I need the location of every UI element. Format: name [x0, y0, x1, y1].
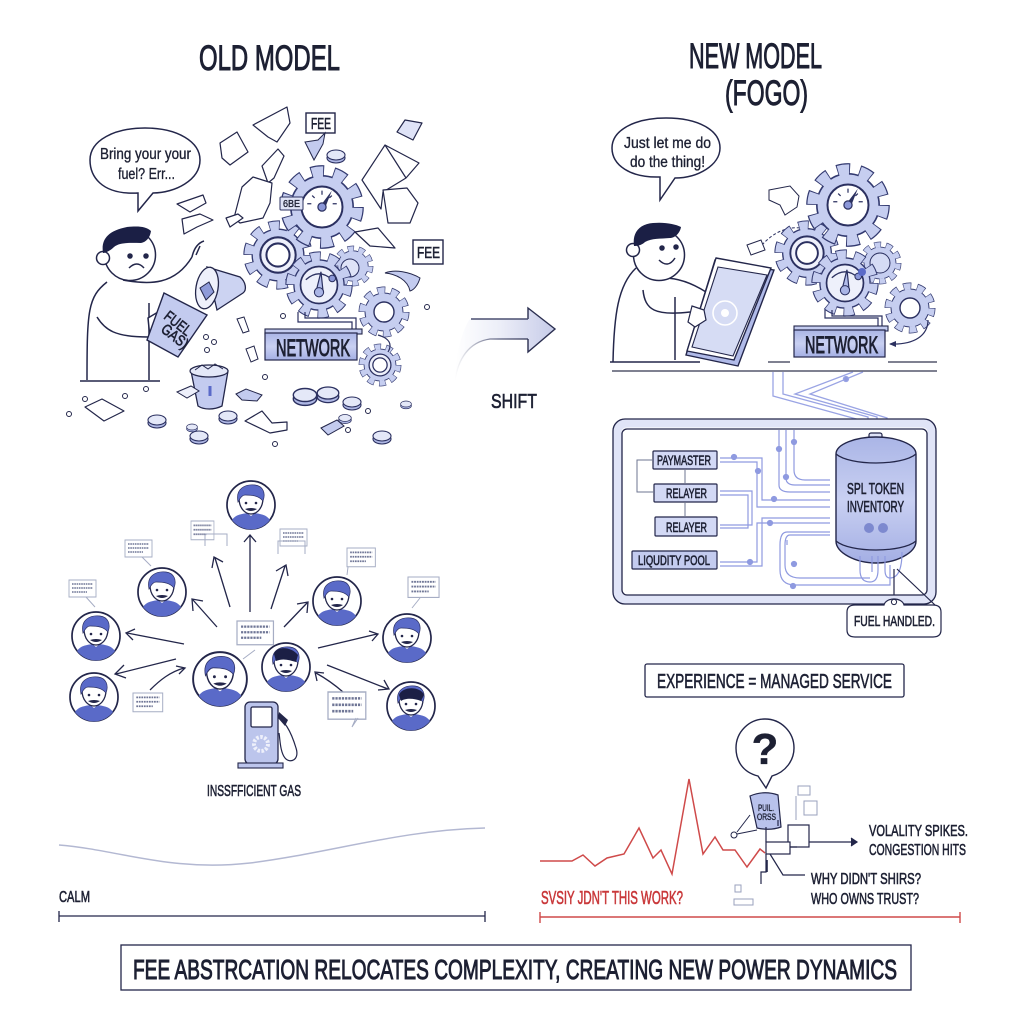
SPL token tank: SPL TOKEN: [847, 481, 904, 498]
scattered coins and bills: [66, 150, 430, 446]
panel: network of users with insufficient gas: [69, 481, 439, 800]
title: new model: (FOGO): [725, 74, 808, 113]
bin with discarded fuel: [190, 364, 228, 409]
network box: NETWORK: [276, 335, 350, 362]
paymaster box: [653, 451, 717, 469]
relayer box: [654, 484, 717, 502]
title: new model: [689, 37, 822, 113]
ground lines: [612, 362, 937, 371]
small fuel can: PUIL.: [758, 803, 774, 813]
speech bubble: bring your fuel: Bring your your: [100, 146, 192, 163]
small fuel can: ORSS: [757, 812, 776, 822]
speech bubble: just let me do the thing: do the thing!: [630, 154, 705, 171]
speech bubble: bring your fuel: fuel? Err...: [118, 166, 175, 183]
network box: [265, 329, 362, 362]
fuel can labelled FUEL GAS: [147, 293, 207, 357]
callout: why didn't shirs: WHO OWNS TRUST?: [811, 891, 919, 908]
small grey icons: [734, 786, 817, 905]
pipes to tank: [773, 372, 887, 440]
routing pipes: [720, 430, 890, 588]
stacked boxes and connectors: [761, 820, 857, 884]
frame: [617, 423, 932, 600]
small speech notes: [69, 521, 439, 727]
gear cluster with gauges: [248, 171, 406, 383]
panel: new model scene: [610, 118, 937, 371]
fuel can labelled FUEL GAS: GAS): [158, 321, 192, 353]
calm timeline: CALM: [59, 889, 90, 906]
SPL token tank: [836, 433, 916, 582]
speech bubble: just let me do the thing: Just let me do: [624, 135, 711, 152]
paymaster box: PAYMASTER: [657, 453, 711, 468]
callout: fuel handled: FUEL HANDLED.: [854, 613, 935, 630]
liquidity pool box: LIQUDITY POOL: [638, 553, 710, 568]
icon: fuel pump: [238, 702, 297, 768]
callout: volatility spikes: CONGESTION HITS: [869, 842, 966, 859]
gear cluster with gauges: 6BE: [283, 199, 300, 210]
character: confused user pouring fuel: [80, 226, 204, 381]
fee tag right: [385, 240, 443, 291]
fee tag right: FEE: [417, 245, 440, 262]
user avatars: [70, 481, 435, 730]
question bubble: [736, 719, 794, 788]
relayer box: RELAYER: [666, 520, 707, 535]
small fuel can: [731, 793, 781, 838]
network box new: NETWORK: [805, 332, 878, 359]
arrows radiating: [115, 535, 389, 692]
experience = managed service label: EXPERIENCE = MANAGED SERVICE: [657, 671, 892, 693]
calm timeline: [59, 828, 485, 922]
shift arrow: SHIFT: [491, 391, 537, 413]
callout: why didn't shirs: WHY DIDN'T SHIRS?: [811, 871, 921, 888]
red question label: SVSIY JDN'T THIS WORK?: [541, 888, 683, 908]
question bubble: ?: [752, 725, 778, 774]
relayer box: RELAYER: [666, 486, 707, 501]
volatile timeline: [540, 719, 968, 923]
title: old model: OLD MODEL: [199, 39, 340, 78]
tablet device: [686, 258, 774, 366]
network box new: [794, 326, 888, 359]
callout: volatility spikes: VOLALITY SPIKES.: [869, 823, 968, 840]
fee tag top: [305, 113, 335, 160]
speech bubble: bring your fuel: [90, 128, 200, 211]
red spike chart: [540, 779, 765, 874]
character: happy user with tablet: [610, 223, 706, 362]
experience = managed service label: [645, 664, 904, 697]
panel: old model chaos scene: [66, 107, 443, 446]
fuel can labelled FUEL GAS: FUEL: [161, 308, 195, 340]
gear cluster new: [747, 169, 932, 347]
relayer box: [655, 517, 717, 536]
bottom conclusion banner: [121, 945, 911, 990]
liquidity pool box: [632, 551, 717, 569]
SPL token tank: INVENTORY: [847, 499, 904, 516]
panel: paymaster and tank diagram: [613, 419, 941, 637]
flying paper receipts: [85, 107, 422, 433]
tilted can pouring into gears: [193, 265, 245, 311]
red axis: [540, 912, 960, 923]
label: insufficient gas: INSSFFICIENT GAS: [207, 783, 301, 800]
callout: fuel handled: [847, 569, 941, 637]
speech bubble: just let me do the thing: [612, 118, 720, 200]
title: new model: NEW MODEL: [689, 37, 822, 76]
shift arrow: [455, 308, 555, 413]
callout: volatility spikes: [869, 823, 968, 859]
callout: why didn't shirs: [811, 871, 921, 908]
fee tag top: FEE: [311, 116, 331, 133]
